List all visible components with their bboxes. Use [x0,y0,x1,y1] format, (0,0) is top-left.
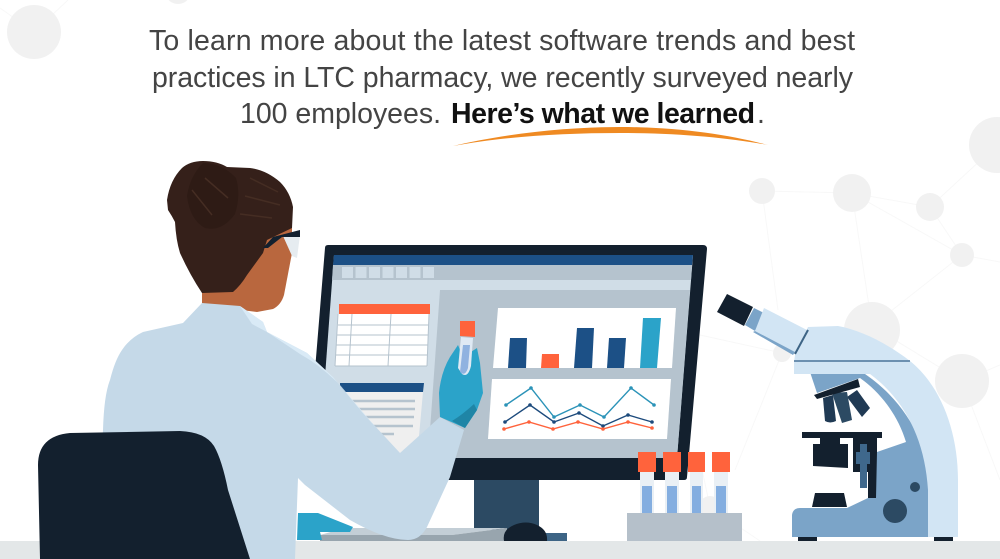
line chart [488,379,671,439]
toolbar buttons [342,267,434,278]
focus knob column [856,444,870,488]
stage and focus block [802,432,882,507]
microscope [717,294,958,541]
monitor frame [306,245,707,480]
bar chart [493,308,676,368]
data table [335,304,430,366]
computer mouse [504,522,547,541]
test tubes in rack [627,452,742,541]
hand holding test tube [439,321,483,428]
monitor stand [474,478,567,541]
hair with bun [167,161,293,293]
intro heading: Here’s what we learned [451,98,755,130]
desk [0,541,1000,559]
control knobs [883,482,920,523]
keyboard [320,528,507,541]
chair [38,431,250,559]
objective turret [814,379,870,423]
mid-blue arm and base [792,372,930,537]
eyepiece tube [717,294,808,355]
intro heading [149,25,855,130]
text document panel [340,383,424,458]
pale body [794,326,958,537]
monitor screen [319,255,693,458]
intro heading: 100 employees. [240,98,441,130]
safety glasses [263,230,300,258]
orange swoosh underline [453,127,768,146]
intro heading: To learn more about the latest software trends and best [149,25,855,57]
computer monitor [306,245,707,541]
intro heading: . [757,98,765,130]
left hand on keyboard [297,513,353,540]
microscope feet [798,536,953,541]
scientist [38,161,483,559]
lab coat [95,303,464,559]
neck and face [202,210,292,312]
intro heading: practices in LTC pharmacy, we recently surveyed nearly [152,62,854,94]
